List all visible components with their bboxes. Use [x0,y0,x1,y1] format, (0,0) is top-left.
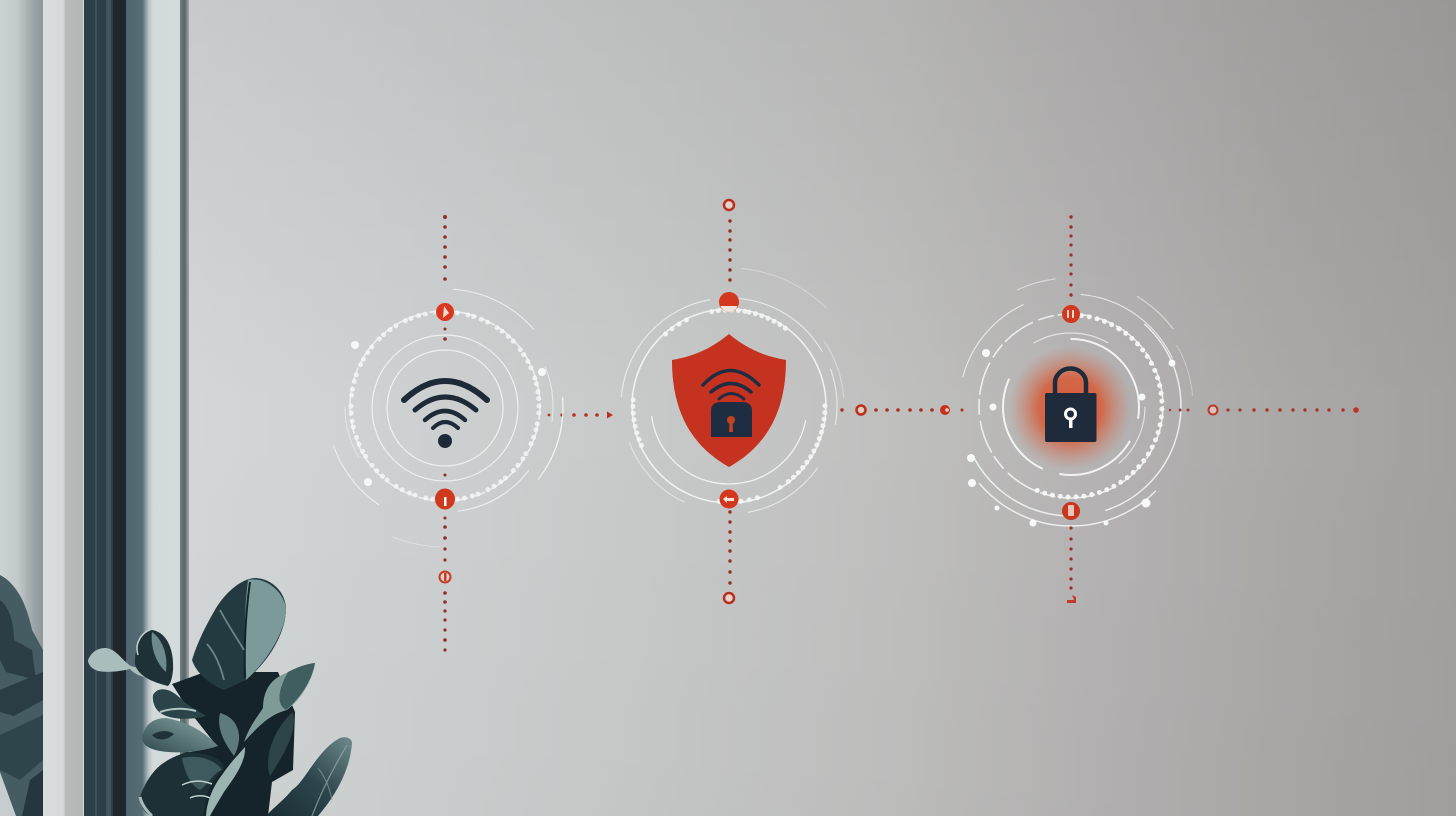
icon: shield wi-fi and lock [703,370,759,437]
vertical dotted line [1069,215,1073,590]
nodes [1062,305,1080,603]
leaf: central small [219,713,239,756]
connector: step one to step two [548,412,613,418]
leaf: large top [192,578,286,690]
leaf: upper-left [153,689,206,719]
window frame and post [0,0,189,816]
leaf: right [244,663,315,742]
leaf: pale small [88,648,154,678]
rings [298,260,592,554]
leaf: lower right dark [268,712,294,776]
step one: wi-fi [298,215,592,652]
vertical dotted line [728,219,732,585]
leaf: small upper [135,630,173,686]
large ring dots [967,349,1176,526]
glow [1008,346,1132,470]
rings [571,248,887,564]
step two: shield [571,200,887,603]
reflection of plant in window [0,575,43,816]
icon: padlock [1045,369,1096,442]
leaf: mid-left [142,718,218,752]
large ring dots [351,341,546,486]
nodes [435,303,455,582]
leaf: bottom right [266,737,352,816]
nodes [719,200,739,603]
connector: step two to step three [840,405,964,415]
rings [901,236,1241,576]
icon: wi-fi [404,381,487,448]
step three: padlock [901,215,1241,603]
connector: step three to end [1169,406,1359,414]
plant [88,578,352,816]
leaf: lower centre pale [206,747,245,816]
icon: shield [672,334,786,467]
vertical dotted line [443,215,447,652]
plant dark centre [148,672,295,816]
leaf: lower-left dark [140,752,224,816]
